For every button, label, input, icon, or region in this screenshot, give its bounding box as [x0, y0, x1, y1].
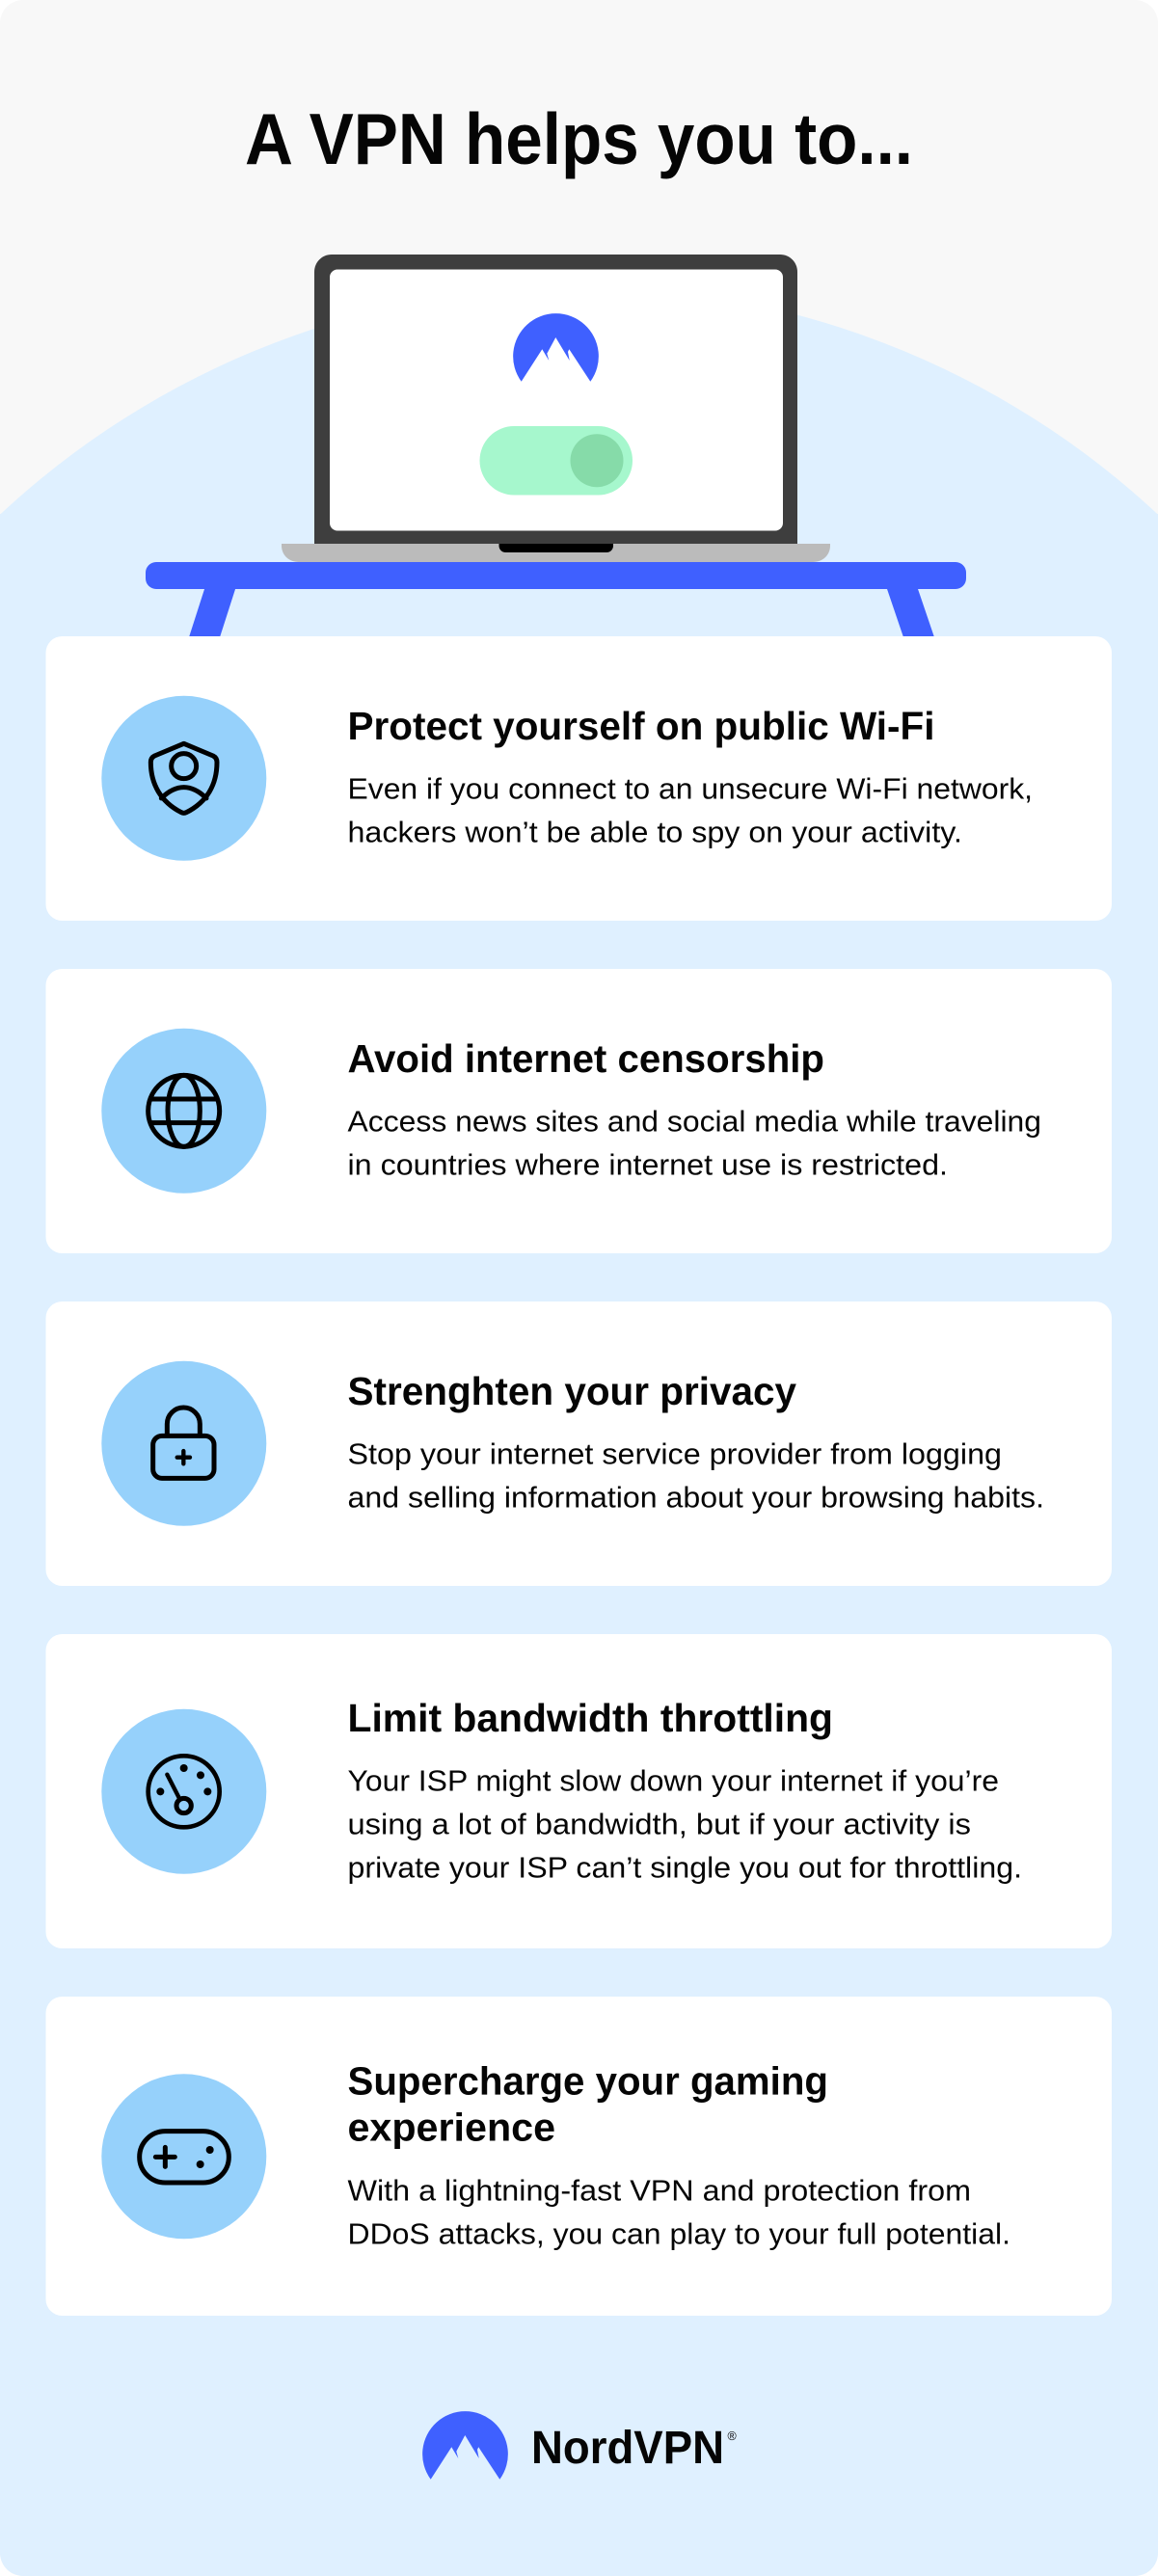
heading: Strenghten your privacy [347, 1369, 796, 1413]
description: private your ISP can’t single you out for throttling. [347, 1850, 1022, 1884]
description: With a lightning-fast VPN and protection from [347, 2174, 971, 2208]
icon: globe [101, 1029, 266, 1194]
screen logo [513, 313, 599, 382]
toggle switch [480, 426, 633, 496]
logo mark [422, 2411, 508, 2480]
heading: experience [347, 2106, 555, 2150]
description: and selling information about your browsing habits. [347, 1481, 1044, 1515]
description [347, 1436, 1044, 1515]
card: gaming [46, 1997, 1112, 2316]
laptop notch [499, 544, 613, 552]
NordVPN footer logo [422, 2411, 737, 2480]
description [347, 771, 1033, 849]
description: hackers won’t be able to spy on your activity. [347, 816, 962, 849]
description: Even if you connect to an unsecure Wi-Fi network, [347, 771, 1033, 805]
description [347, 1104, 1041, 1182]
laptop lid [314, 255, 797, 544]
card: censorship [46, 969, 1112, 1253]
heading [347, 2059, 828, 2150]
card: privacy [46, 1301, 1112, 1586]
registered mark: ® [727, 2429, 737, 2443]
description [347, 1763, 1022, 1884]
title: A VPN helps you to... [245, 98, 913, 179]
description: Your ISP might slow down your internet if you’re [347, 1763, 999, 1797]
description: in countries where internet use is restricted. [347, 1148, 948, 1182]
heading: Limit bandwidth throttling [347, 1696, 833, 1740]
wordmark: NordVPN [531, 2423, 724, 2474]
heading: Protect yourself on public Wi-Fi [347, 704, 935, 748]
description: Access news sites and social media while traveling [347, 1104, 1041, 1138]
table [146, 562, 966, 637]
heading: Avoid internet censorship [347, 1036, 824, 1081]
icon: game controller [101, 2074, 266, 2239]
icon: padlock [101, 1361, 266, 1526]
laptop on table illustration [146, 255, 966, 637]
description: using a lot of bandwidth, but if your activity is [347, 1808, 971, 1841]
card: throttling [46, 1634, 1112, 1948]
description: Stop your internet service provider from logging [347, 1436, 1002, 1470]
heading: Supercharge your gaming [347, 2059, 828, 2104]
card: public Wi-Fi [46, 636, 1112, 921]
laptop base [282, 544, 830, 562]
icon: shield with user [101, 696, 266, 861]
laptop screen [330, 270, 783, 530]
icon: speedometer [101, 1709, 266, 1874]
description [347, 2174, 1010, 2250]
description: DDoS attacks, you can play to your full potential. [347, 2216, 1010, 2250]
